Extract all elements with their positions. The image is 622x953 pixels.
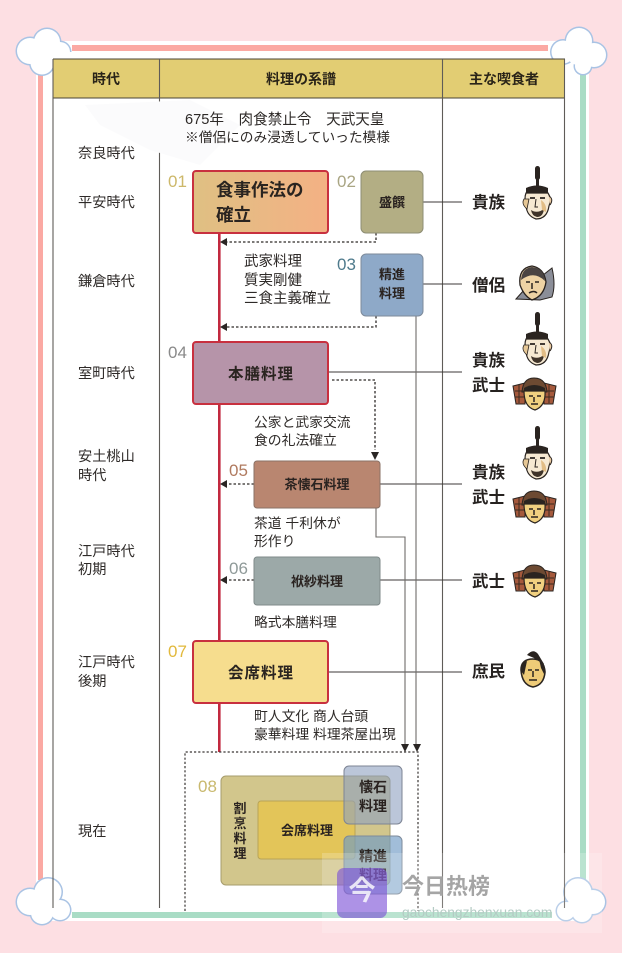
kappo label: 理 bbox=[233, 846, 247, 861]
box 01: 確立 bbox=[216, 205, 251, 225]
era column: 江戸時代 bbox=[78, 544, 135, 560]
icon: warrior bbox=[513, 378, 556, 410]
kaiseki nested: 会席料理 bbox=[281, 823, 333, 838]
kaiseki stone nested: 料理 bbox=[359, 798, 387, 814]
diner labels: 武士 bbox=[472, 376, 505, 395]
watermark bbox=[322, 853, 602, 933]
box 01 bbox=[168, 171, 328, 233]
diner labels: 武士 bbox=[472, 572, 505, 591]
table bbox=[53, 59, 565, 908]
caption: muromachi: 公家と武家交流 bbox=[254, 414, 351, 430]
box 03: 03 bbox=[337, 255, 356, 274]
caption: edo late: 豪華料理 料理茶屋出現 bbox=[254, 727, 396, 742]
icon: commoner bbox=[521, 651, 545, 687]
box 03: 料理 bbox=[379, 286, 405, 301]
table grid bbox=[53, 59, 564, 908]
era column: 奈良時代 bbox=[78, 146, 135, 162]
dotted arrows to timeline bbox=[220, 233, 379, 584]
faint background stain bbox=[85, 100, 240, 165]
caption: tea: 茶道 千利休が bbox=[254, 516, 341, 531]
kappo label: 割 bbox=[233, 801, 247, 816]
era column: 安土桃山 bbox=[78, 449, 135, 465]
box 01: 食事作法の bbox=[216, 180, 304, 200]
diner labels: 貴族 bbox=[472, 463, 506, 482]
era column: 時代 bbox=[78, 468, 106, 484]
shojin nested: 精進 bbox=[359, 848, 387, 864]
era column bbox=[78, 146, 135, 840]
caption: kamakura: 三食主義確立 bbox=[244, 290, 331, 307]
box 07: 07 bbox=[168, 642, 187, 661]
box 05 bbox=[229, 461, 380, 508]
dotted modern cuisine area bbox=[185, 752, 418, 911]
shojin nested: 料理 bbox=[359, 867, 387, 883]
era column: 江戸時代 bbox=[78, 655, 135, 671]
watermark logo bbox=[337, 868, 387, 918]
red main timeline bbox=[218, 233, 221, 752]
connector lines to diners bbox=[328, 202, 462, 672]
cloud corner: bottom left bbox=[16, 877, 72, 926]
cloud corner: top left bbox=[16, 28, 78, 82]
box 02 bbox=[337, 171, 423, 233]
note: meat ban 675: 675年 肉食禁止令 天武天皇 bbox=[185, 111, 384, 128]
header: era: 時代 bbox=[92, 71, 120, 87]
kaiseki stone nested bbox=[344, 766, 402, 824]
header: lineage: 料理の系譜 bbox=[266, 71, 336, 87]
box 04 bbox=[168, 342, 328, 404]
table header band bbox=[53, 59, 565, 98]
era column: 初期 bbox=[78, 562, 106, 578]
kappo label: 料 bbox=[233, 831, 247, 846]
era column: 室町時代 bbox=[78, 366, 135, 382]
box 02: 盛饌 bbox=[379, 195, 405, 210]
era column: 平安時代 bbox=[78, 195, 135, 211]
shojin nested bbox=[344, 836, 402, 894]
cloud corner: bottom right bbox=[556, 877, 606, 924]
era column: 現在 bbox=[78, 824, 106, 840]
caption: kamakura: 質実剛健 bbox=[244, 271, 302, 289]
caption: muromachi bbox=[254, 414, 351, 448]
diner labels: 僧侶 bbox=[472, 276, 505, 295]
era column: 後期 bbox=[78, 674, 106, 690]
box 07 bbox=[168, 641, 328, 703]
icon: noble bbox=[523, 166, 552, 219]
solid lines down to modern cuisine bbox=[376, 316, 421, 752]
note: meat ban 675: ※僧侶にのみ浸透していった模様 bbox=[185, 130, 390, 145]
caption: ryaku-shiki: 略式本膳料理 bbox=[254, 615, 337, 630]
icon: warrior bbox=[513, 565, 556, 597]
cloud corner: top right bbox=[550, 26, 608, 76]
watermark url: gaochengzhenxuan.com bbox=[402, 905, 552, 920]
caption: tea bbox=[254, 516, 341, 549]
note: meat ban 675 bbox=[185, 111, 390, 145]
box 05: 05 bbox=[229, 461, 248, 480]
box 03 bbox=[337, 254, 423, 316]
caption: edo late: 町人文化 商人台頭 bbox=[254, 709, 368, 724]
diner labels: 武士 bbox=[472, 488, 505, 507]
icon: noble bbox=[523, 312, 552, 365]
caption: tea: 形作り bbox=[254, 534, 295, 549]
diner labels bbox=[472, 193, 506, 681]
box 03: 精進 bbox=[379, 267, 405, 282]
caption: muromachi: 食の礼法確立 bbox=[254, 433, 337, 448]
box 02: 02 bbox=[337, 172, 356, 191]
icon: noble bbox=[523, 426, 552, 479]
box 01: 01 bbox=[168, 172, 187, 191]
box 08: modern cuisine: 08 bbox=[198, 777, 217, 796]
box 06: 06 bbox=[229, 559, 248, 578]
kappo bbox=[221, 776, 390, 885]
watermark logo: 今 bbox=[348, 876, 376, 906]
era column: 鎌倉時代 bbox=[78, 274, 135, 290]
box 07: 会席料理 bbox=[228, 664, 294, 682]
box 04: 本膳料理 bbox=[228, 365, 294, 383]
caption: edo late bbox=[254, 709, 396, 742]
box 04: 04 bbox=[168, 343, 187, 362]
box 08: modern cuisine bbox=[198, 766, 402, 894]
diner labels: 庶民 bbox=[472, 662, 506, 681]
caption: kamakura bbox=[244, 253, 331, 307]
watermark title: 今日热榜 bbox=[402, 874, 490, 899]
header: main diners: 主な喫食者 bbox=[469, 71, 539, 87]
caption: kamakura: 武家料理 bbox=[244, 253, 302, 270]
kaiseki nested bbox=[258, 801, 355, 859]
box 05: 茶懐石料理 bbox=[284, 477, 350, 492]
diner labels: 貴族 bbox=[472, 351, 506, 370]
kappo label bbox=[233, 801, 247, 861]
box 06 bbox=[229, 557, 380, 605]
kappo label: 烹 bbox=[233, 816, 247, 831]
diner labels: 貴族 bbox=[472, 193, 506, 212]
icon: warrior bbox=[513, 491, 556, 523]
kaiseki stone nested: 懐石 bbox=[359, 779, 387, 795]
icon: monk bbox=[516, 266, 554, 300]
box 06: 袱紗料理 bbox=[291, 574, 343, 589]
